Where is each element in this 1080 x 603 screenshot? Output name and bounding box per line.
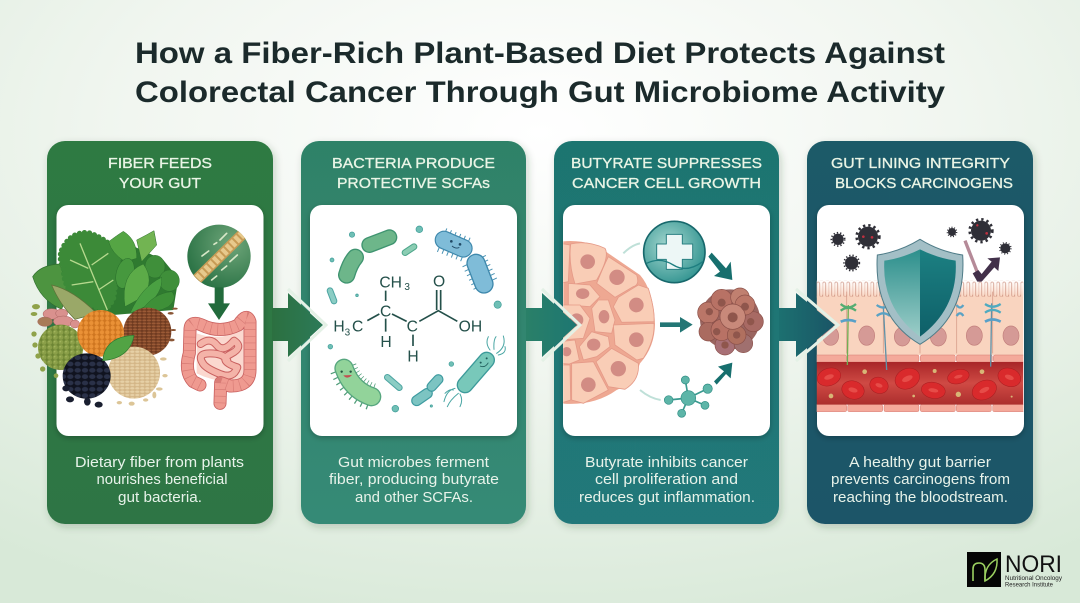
icon: rod bacteria top left	[347, 237, 389, 275]
molecule: butyrate structure: H	[407, 348, 419, 365]
image frame 3	[563, 205, 770, 436]
arrow: fiber to gut	[208, 287, 230, 320]
card background 3	[554, 141, 779, 524]
card background 4	[807, 141, 1033, 524]
card background 1	[47, 141, 273, 524]
icon: brown rice	[123, 308, 171, 356]
body text 3	[579, 455, 755, 506]
heading: butyrate suppresses cancer cell growth	[571, 156, 762, 192]
body text 2: fiber, producing butyrate	[329, 472, 499, 488]
molecule: butyrate structure: O	[433, 274, 445, 291]
icon: oats	[108, 347, 160, 399]
logo: NORI	[967, 551, 1063, 588]
body text 1: Dietary fiber from plants	[75, 455, 244, 471]
icon: shield	[877, 239, 963, 344]
body text 2: and other SCFAs.	[355, 490, 473, 506]
panel: butyrate suppresses cancer cell growth	[554, 141, 779, 524]
body text 4	[831, 455, 1010, 506]
villi fill	[817, 281, 1023, 297]
icon: green bacteria bottom left	[343, 368, 372, 397]
icon: molecule	[664, 376, 712, 417]
icon: small leaf	[103, 335, 134, 361]
heading: gut lining integrity blocks carcinogens	[831, 156, 1013, 192]
icon: orange lentils	[77, 310, 124, 357]
heading: butyrate suppresses cancer cell growth: CANCER CELL GROWTH	[572, 176, 761, 192]
panel: fiber feeds your gut	[31, 141, 273, 524]
title: How a Fiber-Rich Plant-Based Diet Protects Against	[135, 37, 945, 70]
logo subtitle: Nutritional Oncology	[1005, 575, 1063, 582]
icon: smile on green bacteria	[340, 370, 352, 378]
icon: left leaf	[33, 264, 68, 309]
heading: butyrate suppresses cancer cell growth: BUTYRATE SUPPRESSES	[571, 156, 762, 172]
epithelial villi	[817, 281, 1023, 297]
arrow: plus to tumor	[708, 253, 732, 280]
molecule: butyrate structure: H	[380, 334, 392, 351]
lower basement bricks	[813, 405, 1026, 412]
icon: spinach leaves	[109, 231, 179, 313]
scattered beans and oats	[62, 308, 178, 408]
particle eyes	[862, 224, 988, 239]
illustration: bacteria around butyrate molecule	[328, 226, 505, 412]
icon: intestine	[187, 317, 250, 403]
logo mark	[967, 552, 1001, 587]
image frame 1	[56, 205, 264, 436]
panel: gut lining integrity blocks carcinogens	[807, 141, 1033, 524]
faint curved paths	[623, 243, 661, 400]
molecule: butyrate structure: OH	[459, 318, 482, 335]
heading: fiber feeds your gut	[108, 156, 212, 192]
arrow: deflected carcinogens	[965, 241, 1000, 282]
leaf backing	[60, 240, 178, 318]
molecule: butyrate structure	[333, 274, 482, 365]
icon: black beans	[63, 353, 111, 399]
arrow: step 3 to 4	[779, 289, 838, 361]
arrow: step 1 to 2	[272, 289, 326, 361]
image frame 2	[310, 205, 517, 436]
icon: face on flagellated bacteria	[480, 357, 488, 367]
molecule: butyrate structure: CH	[379, 274, 402, 291]
upper basement bricks	[813, 355, 1027, 362]
body text 4: reaching the bloodstream.	[833, 490, 1008, 506]
red blood cells	[817, 368, 1021, 400]
arrow: molecule to tumor	[714, 363, 732, 385]
molecule: butyrate structure: 3	[345, 327, 351, 338]
body text 4: A healthy gut barrier	[849, 455, 991, 471]
icon: blue bacteria top right	[442, 240, 487, 287]
cell dividers	[847, 292, 993, 353]
illustration: gut barrier with shield	[813, 219, 1027, 412]
molecule: butyrate structure: 3	[404, 282, 410, 293]
molecule: butyrate structure: C	[407, 318, 418, 335]
molecule: butyrate structure: C	[380, 304, 391, 321]
logo wordmark: NORI	[1005, 551, 1062, 578]
title	[135, 37, 945, 109]
arrow: cells to tumor	[660, 317, 693, 333]
scattered seeds	[31, 304, 58, 378]
icon: plus circle	[644, 221, 705, 283]
epithelial cells	[817, 297, 1023, 355]
body text 1: nourishes beneficial	[96, 472, 228, 488]
illustration: butyrate and cancer cells	[560, 221, 763, 417]
heading: fiber feeds your gut: YOUR GUT	[119, 176, 201, 192]
panel: bacteria produce protective SCFAs	[301, 141, 526, 524]
body text 1: gut bacteria.	[118, 490, 202, 506]
cell nuclei	[823, 326, 1019, 346]
tight junctions	[841, 303, 1001, 370]
heading: bacteria produce protective SCFAs: PROTECTIVE SCFAs	[337, 176, 490, 192]
title: Colorectal Cancer Through Gut Microbiome Activity	[135, 76, 945, 109]
icon: green peas	[38, 325, 83, 370]
body text 3: Butyrate inhibits cancer	[585, 455, 748, 471]
red blood cell centers	[824, 374, 1014, 393]
icon: face on blue bacteria	[450, 240, 461, 248]
heading: gut lining integrity blocks carcinogens: BLOCKS CARCINOGENS	[835, 176, 1013, 192]
scattered dots	[328, 226, 501, 412]
heading: fiber feeds your gut: FIBER FEEDS	[108, 156, 212, 172]
body text 1	[75, 455, 244, 506]
icon: kale leaf	[60, 233, 119, 311]
icon: flagellated bacteria bottom right	[444, 336, 505, 407]
body text 2: Gut microbes ferment	[338, 455, 489, 471]
icon: pods	[52, 285, 97, 319]
healthy cell cluster	[560, 241, 655, 404]
blood vessel	[817, 362, 1023, 405]
arrow: step 2 to 3	[526, 289, 580, 361]
molecule: butyrate structure: C	[352, 319, 363, 336]
icon: tumor cluster	[698, 288, 763, 355]
logo subtitle	[1005, 575, 1063, 588]
body text 3: reduces gut inflammation.	[579, 490, 755, 506]
icon: fiber circle	[187, 225, 251, 288]
logo subtitle: Research Institute	[1005, 582, 1053, 588]
body text 3: cell proliferation and	[595, 472, 738, 488]
blood particles	[829, 369, 1013, 398]
molecule: butyrate structure: H	[333, 319, 345, 336]
card background 2	[301, 141, 526, 524]
heading: bacteria produce protective SCFAs	[332, 156, 495, 192]
small rods	[330, 247, 438, 401]
icon: carcinogen particles	[831, 219, 1011, 271]
body text 4: prevents carcinogens from	[831, 472, 1010, 488]
body text 2	[329, 455, 499, 506]
icon: red beans	[38, 309, 80, 328]
heading: bacteria produce protective SCFAs: BACTERIA PRODUCE	[332, 156, 495, 172]
illustration: plant foods and intestine	[31, 225, 251, 408]
image frame 4	[817, 205, 1024, 436]
heading: gut lining integrity blocks carcinogens: GUT LINING INTEGRITY	[831, 156, 1010, 172]
